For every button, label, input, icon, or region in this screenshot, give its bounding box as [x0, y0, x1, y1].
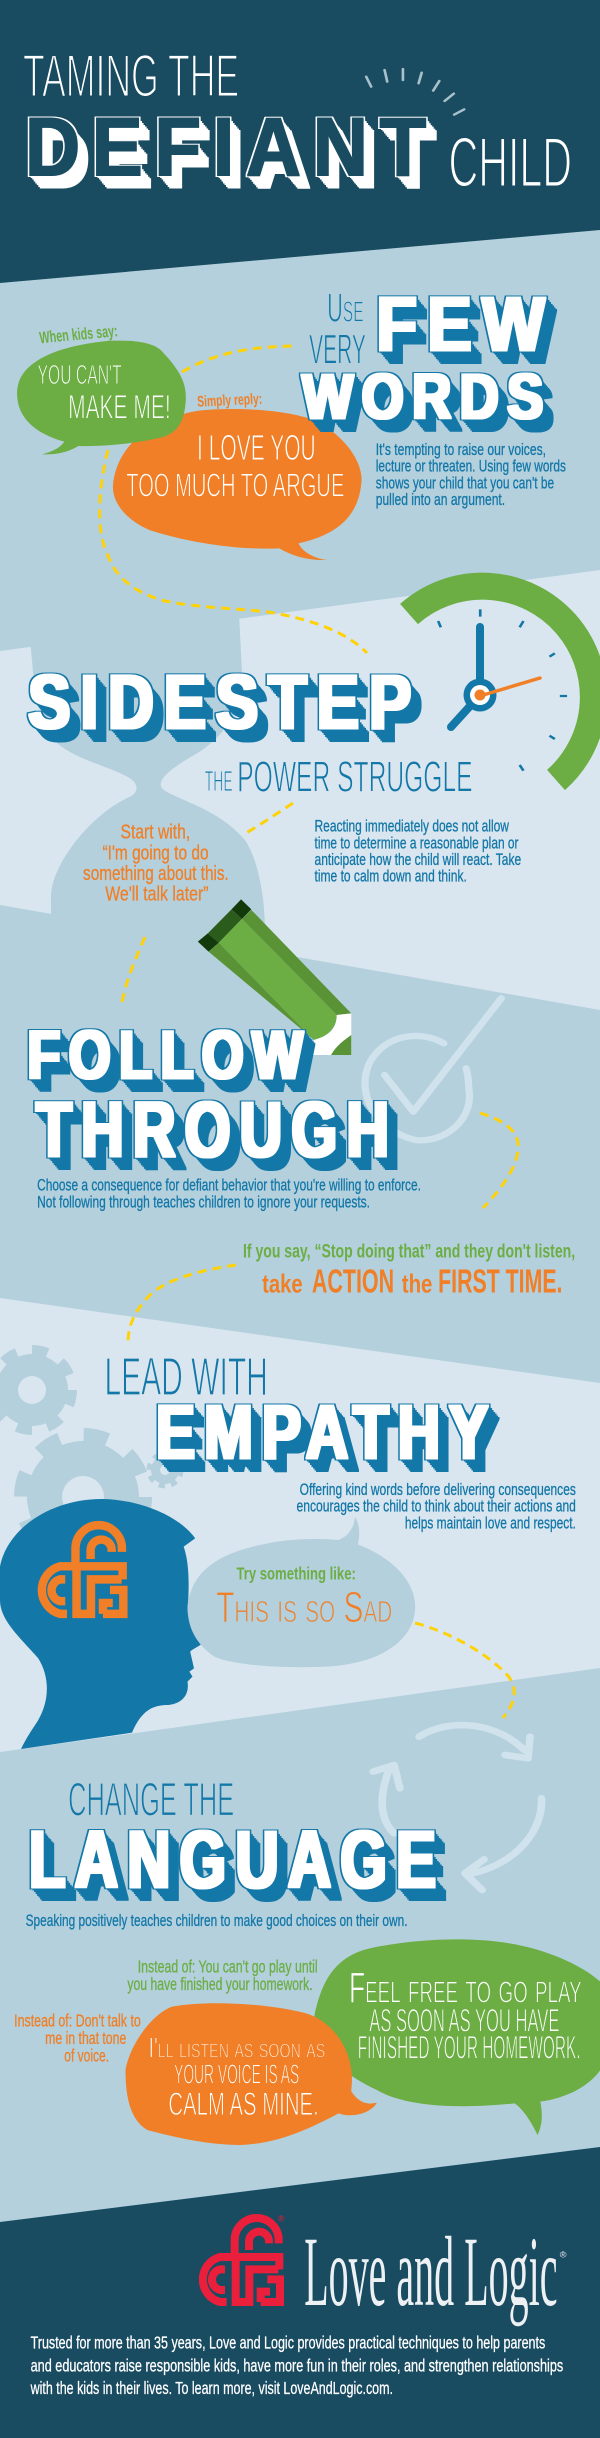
background: empathy pale band — [0, 1298, 600, 1752]
section: change the language — [14, 1725, 600, 2145]
green gauge arc — [409, 586, 593, 780]
callout: start with: We'll talk later” — [105, 882, 209, 905]
body text: time to calm down and think. — [315, 867, 467, 885]
speech bubble: orange listen — [126, 2003, 377, 2145]
speech bubble: empathy — [187, 1517, 415, 1667]
section: love and logic footer — [30, 2214, 567, 2399]
label: instead of orange — [14, 2011, 141, 2065]
label: instead of orange: me in that tone — [45, 2028, 126, 2048]
tiny gear — [149, 1454, 181, 1486]
speech bubble: green child — [17, 341, 186, 454]
callout: take action the first time — [262, 1263, 562, 1300]
section: title header — [23, 43, 572, 202]
icon: red heart logo — [203, 2218, 280, 2302]
large gear — [22, 1436, 144, 1558]
registered mark on heart: ® — [278, 2214, 285, 2223]
section: use very few words — [17, 281, 566, 560]
section: use very few words: VERY — [309, 325, 366, 373]
label: simply reply: Simply reply: — [197, 391, 263, 410]
callout: start with — [83, 820, 229, 905]
registered mark: ® — [560, 2250, 567, 2260]
background: sidestep pale band — [0, 570, 600, 1010]
label: try something like: Try something like: — [236, 1564, 356, 1584]
section: use very few words: Use — [327, 285, 364, 331]
bubble text: i'll listen — [148, 2031, 325, 2122]
section: change the language: CHANGE THE — [68, 1773, 234, 1826]
callout: take action the first time: ACTION — [312, 1263, 394, 1300]
small upper gear — [0, 1351, 71, 1429]
callout: start with: “I'm going to do — [103, 841, 209, 864]
bubble text: i'll listen: YOUR VOICE IS AS — [174, 2059, 299, 2090]
label: when kids say: When kids say: — [38, 321, 119, 347]
head silhouette — [0, 1499, 205, 1749]
label: instead of orange: of voice. — [64, 2046, 109, 2065]
footer text — [30, 2333, 563, 2399]
callout: take action the first time: take — [262, 1269, 303, 1298]
body text: Not following through teaches children to ignore your requests. — [37, 1192, 370, 1211]
icon: rays — [366, 69, 464, 115]
section: lead with empathy: LEAD WITH — [104, 1348, 268, 1407]
section: lead with empathy — [0, 1348, 576, 1749]
icon: orange heart logo — [42, 1525, 123, 1614]
section: use very few words: YOU CAN'T — [37, 360, 122, 391]
icon: cycle arrows — [373, 1725, 542, 1890]
bubble text: too much to argue: TOO MUCH TO ARGUE — [126, 467, 344, 504]
label: instead of green: Instead of: You can't go play until — [138, 1957, 318, 1976]
body text — [376, 440, 566, 509]
speech bubble: orange reply — [113, 409, 362, 560]
callout: start with: Start with, — [121, 820, 190, 843]
heading: follow: FOLLOW — [28, 1016, 311, 1093]
icon: gears — [0, 1351, 181, 1558]
callout: take action the first time: the — [402, 1269, 432, 1298]
heading: defiant: DEFIANT — [25, 101, 438, 194]
heading: taming the: TAMING THE — [23, 43, 239, 110]
bubble text: i'll listen: I'll listen as soon as — [148, 2031, 325, 2064]
hourglass shape — [31, 617, 265, 963]
bubble text: i love you: I LOVE YOU — [197, 428, 316, 468]
section: follow through — [28, 998, 575, 1300]
icon: pencil — [198, 899, 351, 1055]
section: sidestep the power struggle — [28, 659, 521, 905]
bubble text: this is so sad: This is so Sad — [216, 1583, 392, 1632]
bubble text: i'll listen: CALM AS MINE. — [168, 2087, 319, 2122]
clock hands — [451, 627, 480, 727]
label: instead of green — [127, 1957, 318, 1994]
section: sidestep the power struggle: THE — [205, 765, 233, 798]
bubble text: make me: MAKE ME! — [68, 387, 171, 426]
icon: clock — [409, 586, 593, 780]
speech bubble: green feel free — [314, 1939, 600, 2135]
body text: pulled into an argument. — [376, 490, 505, 509]
dashed connector lines — [100, 346, 518, 1718]
icon: check mark — [365, 998, 501, 1140]
bubble text: feel free — [349, 1964, 582, 2066]
callout: start with: something about this. — [83, 861, 229, 885]
label: instead of green: you have finished your homework. — [127, 1974, 313, 1994]
body text — [37, 1176, 421, 1211]
label: instead of orange: Instead of: Don't talk to — [14, 2011, 141, 2030]
heading: through: THROUGH — [36, 1086, 398, 1174]
heading: sidestep: SIDESTEP — [28, 659, 421, 745]
clock ticks — [438, 609, 567, 771]
body text — [315, 817, 521, 885]
body text — [297, 1480, 576, 1532]
